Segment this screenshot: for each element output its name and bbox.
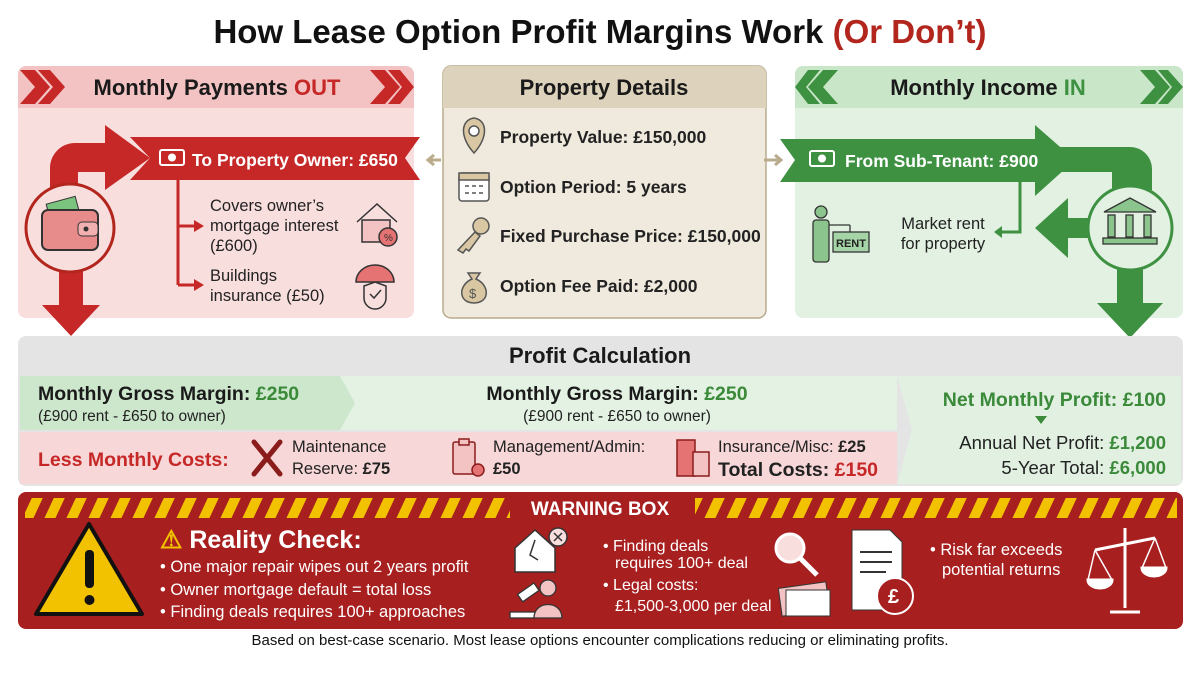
- text: property value: Property Value: £150,000: [500, 127, 706, 147]
- text: risk exceeds: • Risk far exceeds: [930, 541, 1062, 559]
- text: net monthly profit: Net Monthly Profit: £100: [943, 389, 1166, 411]
- icon: wrench: [254, 442, 280, 474]
- heading: property details: Property Details: [520, 75, 688, 100]
- icon: document pound: [852, 530, 913, 614]
- icon: calendar: [459, 173, 489, 201]
- text: gross margin left: Monthly Gross Margin: £250: [38, 383, 299, 405]
- icon: house percent: [357, 204, 397, 246]
- icon: wallet: [26, 184, 114, 272]
- arrow: up and right: [50, 125, 150, 190]
- panel: profit calculation: (£900 rent - £650 to owner): [523, 408, 711, 425]
- arrow: market rent branch: [1000, 182, 1020, 232]
- text: management: £50: [493, 460, 521, 478]
- panel: monthly payments out: [18, 66, 420, 336]
- text: less monthly costs: Less Monthly Costs:: [38, 449, 229, 471]
- text: fixed purchase price: Fixed Purchase Price: £150,000: [500, 226, 761, 246]
- icon: location: [464, 118, 484, 153]
- panel: profit calculation: [18, 336, 1183, 486]
- icon: building doc: [677, 440, 709, 476]
- text: buildings insurance: Buildings: [210, 267, 277, 285]
- panel: property details: [428, 66, 781, 318]
- icon: key: [458, 218, 489, 253]
- icon: money cards: [778, 582, 830, 616]
- text: reality bullets: • Owner mortgage default = total loss: [160, 581, 431, 599]
- ribbon: from sub-tenant: [780, 125, 1075, 196]
- text: reality bullets: • One major repair wipes out 2 years profit: [160, 558, 469, 576]
- title: How Lease Option Profit Margins Work (Or Don’t): [213, 13, 987, 50]
- icon: broken house: [515, 528, 567, 572]
- arrow: small right: [764, 155, 781, 165]
- text: mortgage interest: (£600): [210, 237, 258, 255]
- arrow: small left: [428, 155, 441, 165]
- text: mortgage interest: mortgage interest: [210, 217, 339, 235]
- text: buildings insurance: insurance (£50): [210, 287, 325, 305]
- heading: warning box: WARNING BOX: [531, 499, 669, 520]
- text: risk exceeds: potential returns: [942, 561, 1060, 579]
- icon: money bag: [462, 273, 486, 303]
- panel: warning box: [18, 492, 1183, 629]
- icon: document pound: £: [888, 586, 899, 608]
- text: option fee paid: Option Fee Paid: £2,000: [500, 276, 698, 296]
- text: option period: Option Period: 5 years: [500, 177, 687, 197]
- arrow: bend to bank: [1050, 147, 1152, 190]
- arrow: left from bank: [1035, 198, 1090, 258]
- icon: magnifier: [776, 534, 817, 575]
- icon: bank: [1088, 186, 1172, 270]
- text: reality bullets: • Finding deals requires 100+ approaches: [160, 603, 465, 621]
- panel: profit calculation: (£900 rent - £650 to owner): [38, 408, 226, 425]
- icon: person with rent sign: RENT: [836, 238, 866, 250]
- ribbon: to property owner: To Property Owner: £650: [192, 150, 398, 170]
- text: finding deals and legal costs: £1,500-3,000 per deal: [615, 598, 772, 615]
- ribbon: to property owner: [130, 137, 420, 180]
- text: annual and 5-year: 5-Year Total: £6,000: [1001, 457, 1166, 478]
- arrow: down: [42, 270, 100, 336]
- icon: warning triangle: [36, 524, 142, 614]
- heading: monthly payments out: Monthly Payments OUT: [94, 75, 341, 100]
- text: finding deals and legal costs: • Finding deals: [603, 538, 708, 555]
- text: management: Management/Admin:: [493, 438, 645, 456]
- icon: gavel and person: [510, 580, 562, 618]
- icon: scales: [1088, 528, 1166, 612]
- heading: reality check: ⚠ Reality Check:: [160, 526, 362, 554]
- text: finding deals and legal costs: requires 100+ deal: [615, 555, 748, 572]
- footer note: Based on best-case scenario. Most lease options encounter complications reducing or eliminating profits.: [251, 632, 949, 649]
- panel: monthly income in: [780, 66, 1183, 338]
- text: maintenance: Maintenance: [292, 438, 386, 456]
- ribbon: from sub-tenant: From Sub-Tenant: £900: [845, 151, 1038, 171]
- heading: profit calculation: Profit Calculation: [509, 343, 691, 368]
- text: finding deals and legal costs: • Legal costs:: [603, 577, 698, 594]
- arrow: down green: [1097, 268, 1163, 338]
- icon: house percent: %: [384, 233, 393, 244]
- text: insurance and total: Insurance/Misc: £25: [718, 438, 866, 456]
- text: annual and 5-year: Annual Net Profit: £1,200: [959, 432, 1166, 453]
- icon: person with rent sign: [813, 206, 869, 262]
- text: mortgage interest: Covers owner’s: [210, 197, 324, 215]
- text: market rent: for property: [901, 235, 986, 253]
- text: gross margin center: Monthly Gross Margin: £250: [486, 383, 748, 405]
- text: maintenance: Reserve: £75: [292, 460, 390, 478]
- text: insurance and total: Total Costs: £150: [718, 459, 878, 481]
- icon: clipboard: [453, 439, 484, 476]
- text: market rent: Market rent: [901, 215, 985, 233]
- icon: money bag: $: [469, 286, 477, 301]
- branch lines: [178, 180, 196, 285]
- heading: monthly income in: Monthly Income IN: [890, 75, 1086, 100]
- icon: umbrella shield: [356, 265, 394, 309]
